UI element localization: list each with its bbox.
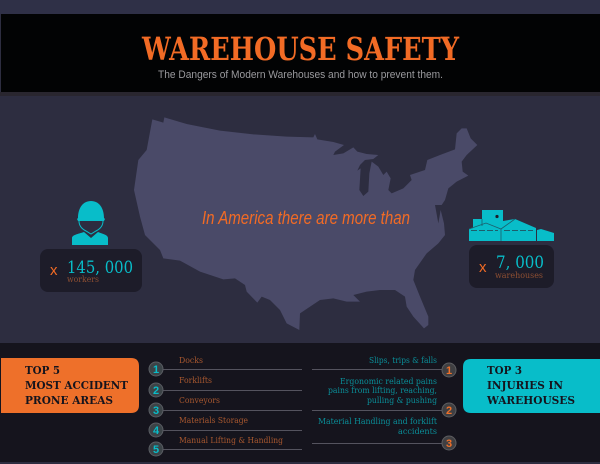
list: accident prone areas: 5	[153, 444, 159, 456]
panel: top 5 areas heading: TOP 5	[25, 363, 60, 377]
list: accident prone areas: 1	[153, 364, 159, 376]
multiplier: x	[50, 262, 58, 279]
warehouses stat box	[469, 245, 554, 288]
list: accident prone areas: 4	[153, 425, 160, 437]
panel: top 5 areas heading: MOST ACCIDENT	[25, 378, 128, 392]
panel: top 3 injuries heading: INJURIES IN	[487, 378, 563, 392]
title: WAREHOUSE SAFETY	[141, 31, 459, 68]
map caption: In America there are more than	[202, 208, 410, 228]
icon: worker with hard hat	[72, 201, 108, 245]
warehouse label: warehouses	[495, 271, 543, 281]
panel: top 3 injuries heading: TOP 3	[487, 363, 522, 377]
icon: warehouse buildings	[469, 210, 554, 241]
panel: top 5 areas heading: PRONE AREAS	[25, 393, 113, 407]
worker count: 145, 000	[67, 258, 133, 278]
map of the United States	[134, 117, 477, 330]
bottom panel	[0, 343, 600, 462]
list: top injuries: 1	[446, 365, 452, 377]
list: accident prone areas: 2	[153, 385, 159, 397]
panel: top 3 injuries heading	[463, 359, 600, 413]
warehouse count: 7, 000	[496, 253, 544, 273]
list: top injuries: 2	[446, 405, 452, 417]
list: accident prone areas: Conveyors	[179, 396, 220, 406]
list: top injuries: Material Handling and forklift	[318, 417, 438, 427]
list: top injuries	[312, 356, 456, 450]
panel: top 3 injuries heading: WAREHOUSES	[486, 393, 575, 407]
panel: top 5 areas heading	[1, 358, 139, 413]
list: accident prone areas	[149, 356, 302, 456]
list: top injuries: 3	[446, 438, 452, 450]
list: accident prone areas: Docks	[179, 356, 203, 366]
list: top injuries: pains from lifting, reaching,	[328, 386, 437, 396]
list: accident prone areas: Forklifts	[179, 376, 212, 386]
multiplier: x	[479, 259, 487, 276]
list: accident prone areas: 3	[153, 405, 159, 417]
worker label: workers	[67, 275, 99, 285]
list: accident prone areas: Manual Lifting & Handling	[179, 436, 283, 446]
workers stat box	[40, 249, 142, 292]
list: accident prone areas: Materials Storage	[179, 416, 248, 426]
subtitle: The Dangers of Modern Warehouses and how to prevent them.	[158, 69, 443, 81]
list: top injuries: Ergonomic related pains	[340, 377, 437, 387]
header band	[1, 14, 600, 92]
list: top injuries: Slips, trips & falls	[369, 356, 437, 366]
list: top injuries: accidents	[398, 427, 437, 437]
list: top injuries: pulling & pushing	[367, 396, 438, 406]
